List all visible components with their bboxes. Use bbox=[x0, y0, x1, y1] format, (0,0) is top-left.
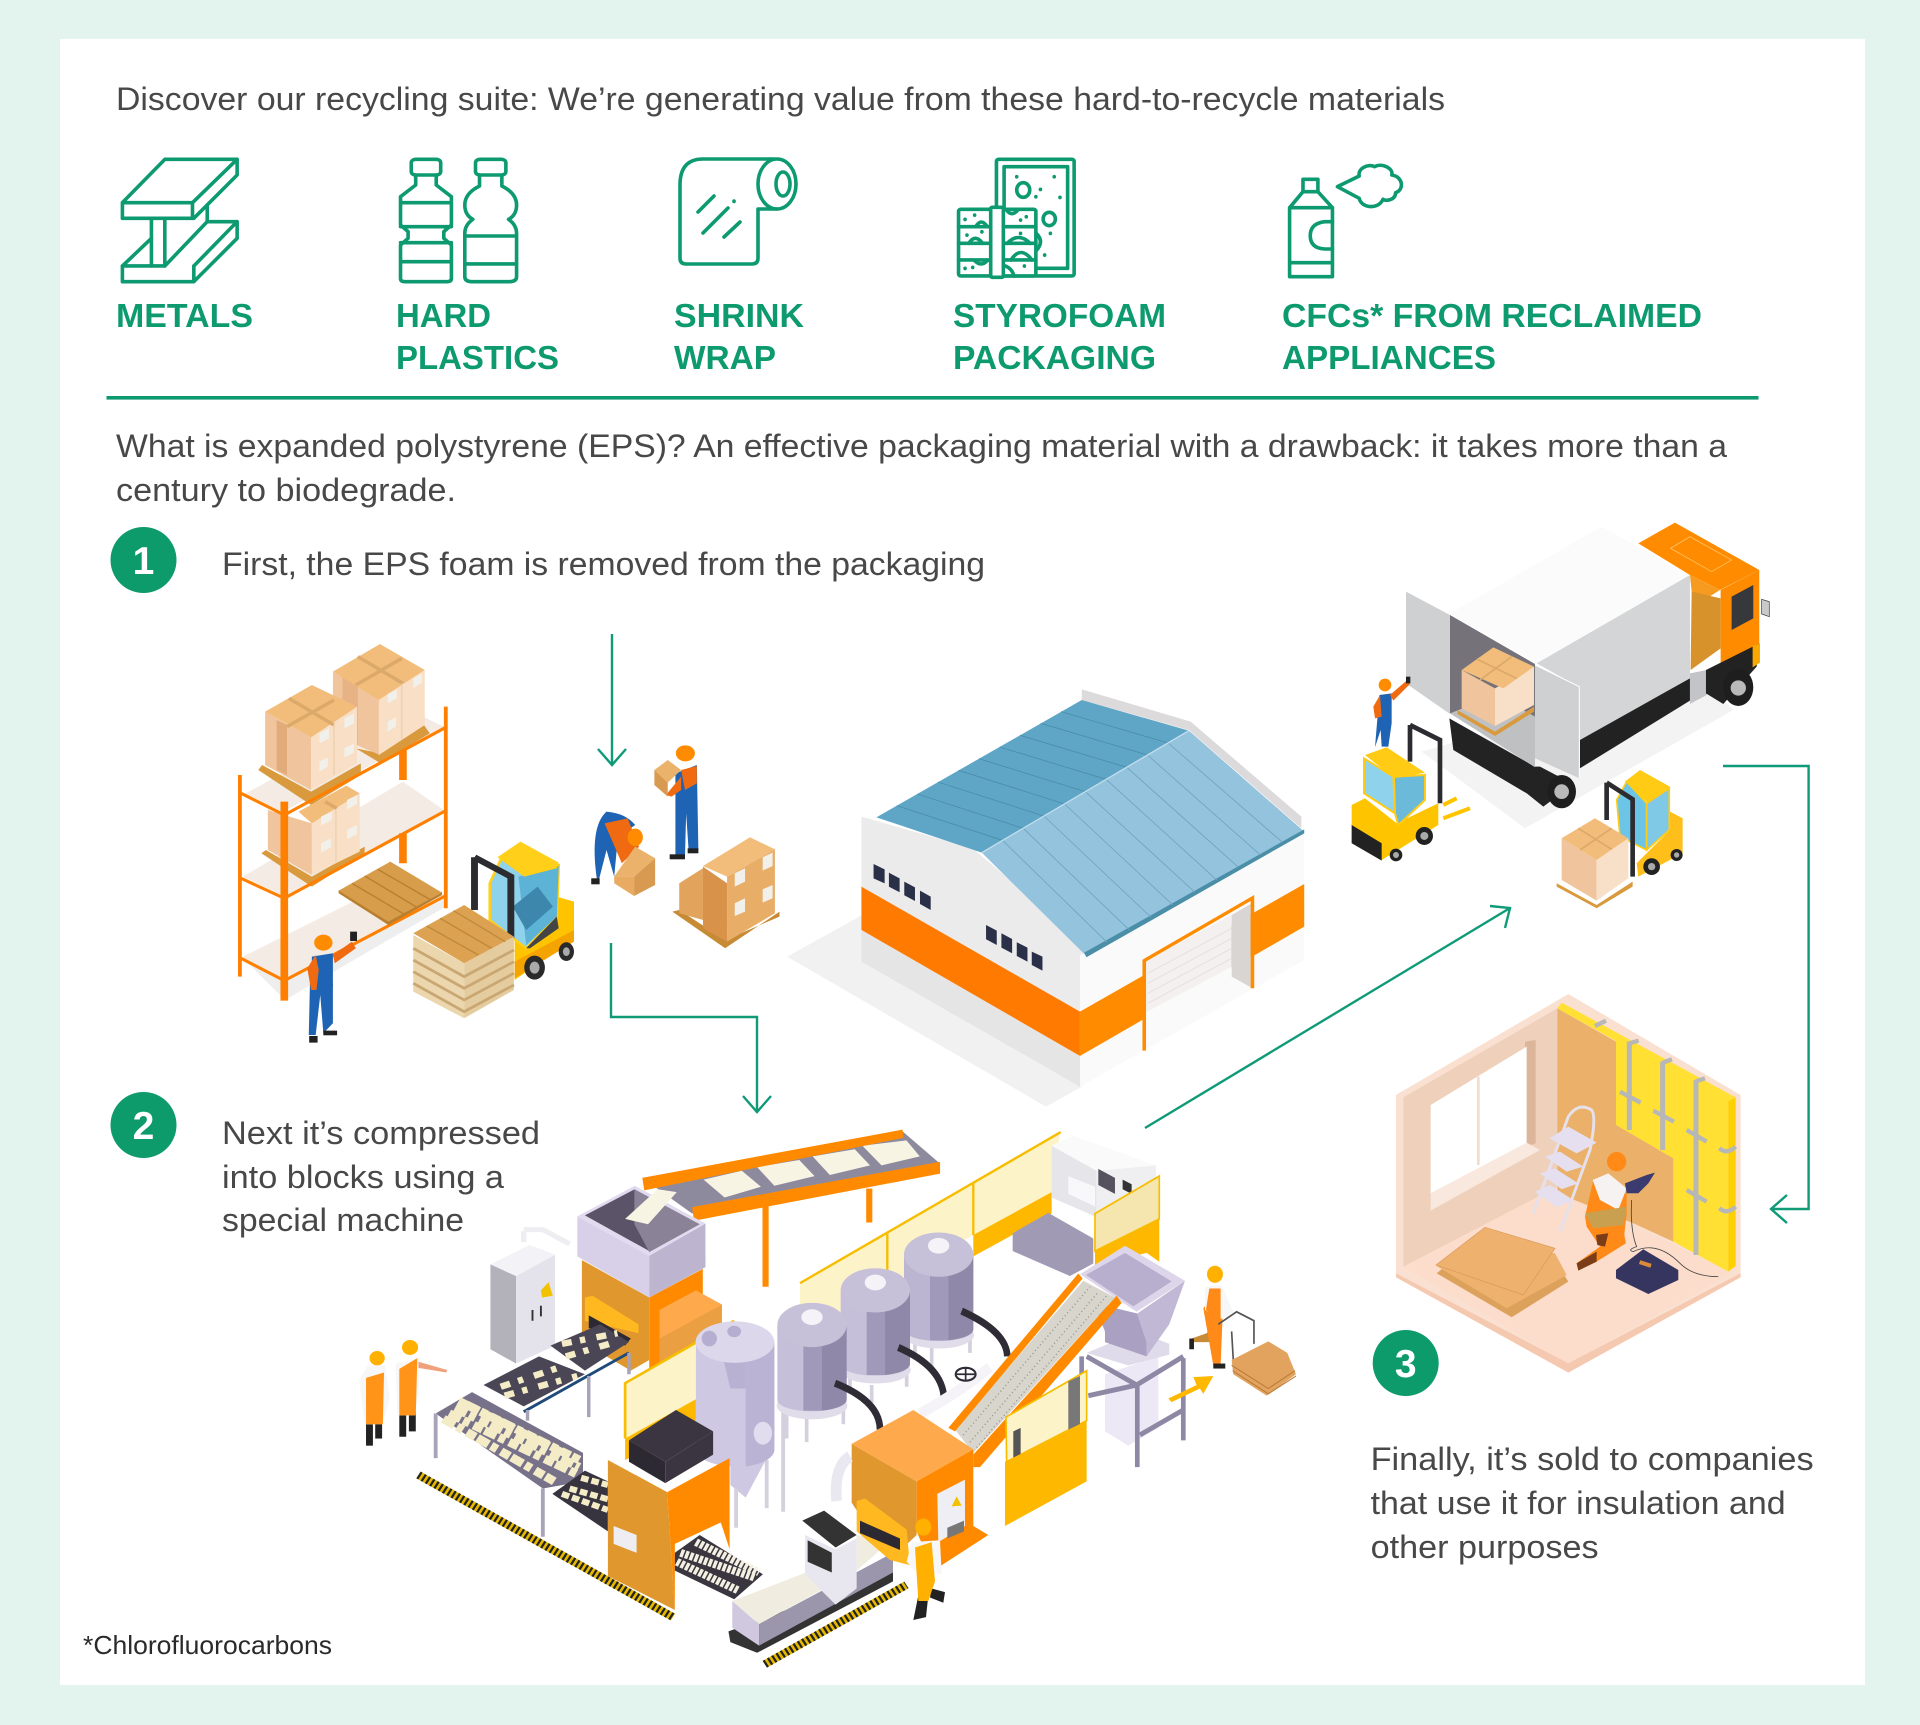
control cabinets bbox=[1013, 1136, 1159, 1276]
large tank bbox=[696, 1321, 783, 1528]
long safety fence bbox=[800, 1132, 1061, 1339]
label: shrink wrap: WRAP bbox=[674, 339, 776, 376]
label: hard plastics: HARD bbox=[396, 297, 491, 334]
icon: aerosol can with CFC cloud bbox=[1290, 165, 1401, 277]
hazard floor stripes bbox=[418, 1475, 906, 1664]
step 2 text bbox=[222, 1115, 540, 1238]
step 3 text: Finally, it’s sold to companies bbox=[1371, 1441, 1814, 1477]
arrow: elbow from truck to room bbox=[1723, 766, 1809, 1223]
pallet with lower boxes bbox=[261, 786, 365, 887]
footnote: *Chlorofluorocarbons bbox=[83, 1630, 332, 1660]
step 2 text: into blocks using a bbox=[222, 1159, 504, 1195]
worker bending over box bbox=[591, 812, 655, 896]
white duct bbox=[836, 1456, 850, 1501]
illustration: recycling factory line, right half bbox=[777, 1132, 1296, 1620]
valve bbox=[920, 1367, 990, 1414]
step 3 text bbox=[1371, 1441, 1814, 1565]
step 3 text: that use it for insulation and bbox=[1371, 1485, 1786, 1521]
left safety fence bbox=[625, 1321, 734, 1460]
insulation wall bbox=[1557, 1003, 1736, 1272]
roller door bbox=[1144, 898, 1252, 1051]
rack frame bbox=[240, 707, 446, 1001]
inclined feed conveyor bbox=[642, 1130, 940, 1287]
illustration: warehouse racking, forklift and workers bbox=[240, 644, 780, 1043]
arrow: elbow to compress machine bbox=[611, 943, 771, 1112]
stacked pallets on forks bbox=[413, 905, 514, 1018]
flake conveyors bbox=[436, 1324, 629, 1537]
label: CFCs from reclaimed appliances: APPLIANCES bbox=[1282, 339, 1496, 376]
label: CFCs from reclaimed appliances: CFCs* FROM RECLAIMED bbox=[1282, 297, 1702, 334]
step 2 text: special machine bbox=[222, 1202, 464, 1238]
cart with boards bbox=[1218, 1312, 1296, 1396]
label: hard plastics: PLASTICS bbox=[396, 339, 559, 376]
label: metals: METALS bbox=[116, 297, 253, 334]
worker walking by machine bbox=[907, 1519, 945, 1620]
shredder hopper on stand bbox=[1080, 1246, 1185, 1467]
pallet with upper boxes bbox=[258, 685, 361, 805]
step 1 text: First, the EPS foam is removed from the packaging bbox=[222, 546, 985, 582]
empty pallet bbox=[339, 862, 442, 925]
icon: shrink wrap roll bbox=[680, 159, 796, 264]
ground shadow bbox=[1422, 673, 1733, 828]
text: what is EPS bbox=[116, 428, 1727, 508]
step 1 badge bbox=[110, 527, 176, 593]
output belt bbox=[675, 1535, 763, 1599]
illustration: truck loading with forklifts bbox=[1352, 523, 1769, 908]
text: what is EPS: What is expanded polystyrene (EPS)? An effective packaging material with a drawback: it takes more than a bbox=[116, 428, 1727, 464]
worker pushing cart bbox=[1189, 1266, 1233, 1369]
pallet stack rear boxes bbox=[333, 644, 430, 763]
label: styrofoam packaging bbox=[953, 297, 1166, 376]
illustration: room insulation installation bbox=[1396, 994, 1741, 1373]
icon: metals I-beam bbox=[122, 159, 237, 282]
step 1 badge: 1 bbox=[133, 540, 154, 583]
orange output machine bbox=[852, 1410, 988, 1571]
side wall bbox=[861, 817, 1084, 1087]
two supervising workers bbox=[359, 1340, 447, 1446]
step ladder bbox=[1533, 1107, 1597, 1232]
step 3 text: other purposes bbox=[1371, 1529, 1599, 1565]
truck box bbox=[1406, 527, 1707, 808]
text: what is EPS: century to biodegrade. bbox=[116, 472, 456, 508]
step 2 badge: 2 bbox=[133, 1105, 154, 1148]
icon: styrofoam packaging bbox=[959, 159, 1074, 277]
step 2 text: Next it’s compressed bbox=[222, 1115, 540, 1151]
tray machine bbox=[728, 1511, 893, 1653]
left forklift bbox=[1352, 725, 1470, 861]
pallet of boxes next to workers bbox=[672, 837, 780, 948]
boxes inside truck bbox=[1457, 647, 1534, 736]
electrical cabinet bbox=[490, 1230, 570, 1364]
step 3 badge bbox=[1373, 1330, 1439, 1396]
tanks row bbox=[777, 1232, 1007, 1442]
step 2 badge bbox=[110, 1092, 176, 1158]
battery charger bbox=[1616, 1249, 1678, 1294]
label: CFCs from reclaimed appliances bbox=[1282, 297, 1702, 376]
label: shrink wrap bbox=[674, 297, 804, 376]
worker pointing at rack bbox=[307, 932, 357, 1043]
front wall bbox=[1080, 832, 1304, 1087]
forklift bbox=[474, 842, 574, 980]
truck cab bbox=[1638, 523, 1769, 706]
label: shrink wrap: SHRINK bbox=[674, 297, 804, 334]
label: hard plastics bbox=[396, 297, 559, 376]
roof bbox=[876, 689, 1304, 957]
hopper and press machine bbox=[577, 1186, 722, 1371]
rack shelves bbox=[243, 707, 446, 1000]
room shell bbox=[1396, 994, 1741, 1373]
illustration: recycling factory line, left half bbox=[359, 1130, 940, 1664]
yellow gate bbox=[1005, 1371, 1087, 1526]
arrow: diagonal from factory to truck bbox=[1145, 906, 1510, 1128]
insulation boards on floor bbox=[1436, 1227, 1568, 1317]
right forklift with boxes bbox=[1557, 770, 1683, 908]
step 3 badge: 3 bbox=[1395, 1343, 1417, 1386]
yellow direction arrow bbox=[1168, 1376, 1213, 1402]
illustration: warehouse building bbox=[787, 689, 1304, 1107]
label: styrofoam packaging: PACKAGING bbox=[953, 339, 1156, 376]
worker signalling bbox=[1373, 677, 1410, 747]
inclined speckled conveyor bbox=[948, 1274, 1122, 1467]
side windows bbox=[874, 864, 1042, 971]
central orange compactor bbox=[608, 1410, 730, 1610]
icon: hard plastic bottles bbox=[401, 159, 517, 282]
label: styrofoam packaging: STYROFOAM bbox=[953, 297, 1166, 334]
worker carrying box bbox=[654, 745, 698, 859]
worker drilling bbox=[1577, 1152, 1718, 1277]
heading: recycling suite intro: Discover our recycling suite: We’re generating value from these hard-to-recycle materials bbox=[116, 81, 1445, 117]
arrow: unpack to next step, straight down bbox=[598, 634, 626, 765]
ground shadow bbox=[787, 915, 1082, 1107]
